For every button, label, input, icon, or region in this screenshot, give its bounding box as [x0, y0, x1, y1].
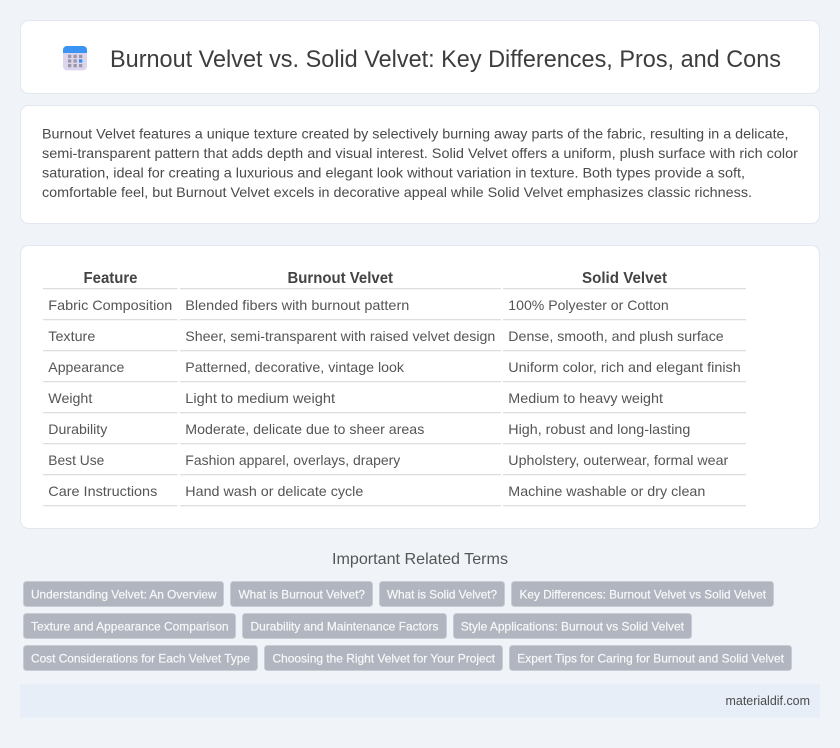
panel: header: [20, 20, 820, 94]
footer source text: materialdif.com: [726, 693, 810, 708]
row: appearance: Appearance: [48, 359, 125, 375]
row: durability: [43, 421, 746, 444]
row: fabric composition: 100% Polyester or Cotton: [508, 297, 669, 313]
tag: [24, 646, 258, 670]
row: appearance: [43, 359, 746, 382]
intro text: semi-transparent pattern that adds depth and visual interest. Solid Velvet offers a uniform, plush surface with rich color: [42, 145, 798, 161]
row: texture: Dense, smooth, and plush surface: [508, 328, 724, 344]
panel: comparison table: [20, 246, 820, 528]
tag: Understanding Velvet: An Overview: [31, 587, 217, 601]
intro text: [42, 126, 798, 200]
tag: [230, 582, 372, 606]
row: care instructions: [43, 483, 746, 506]
row: best use: Upholstery, outerwear, formal wear: [508, 452, 729, 468]
table header row: Burnout Velvet: [288, 270, 394, 287]
tag: [242, 614, 446, 638]
tag: What is Solid Velvet?: [387, 587, 497, 601]
tag: Key Differences: Burnout Velvet vs Solid Velvet: [520, 587, 767, 601]
intro text: saturation, ideal for creating a luxurious and elegant look without variation in texture. Both types provide a soft,: [42, 164, 745, 180]
row: care instructions: Hand wash or delicate cycle: [185, 483, 364, 499]
row: fabric composition: [43, 297, 746, 320]
row: weight: [43, 390, 746, 413]
tag: [454, 614, 692, 638]
tag: What is Burnout Velvet?: [238, 587, 365, 601]
tag: Texture and Appearance Comparison: [31, 619, 228, 633]
footer: [20, 684, 820, 718]
title: Burnout Velvet vs. Solid Velvet: Key Differences, Pros, and Cons: [110, 46, 781, 73]
related term tags: [24, 582, 792, 670]
row: best use: Fashion apparel, overlays, drapery: [185, 452, 400, 468]
intro text: Burnout Velvet features a unique texture created by selectively burning away parts of the fabric, resulting in a delicate,: [42, 126, 788, 142]
row: fabric composition: Fabric Composition: [48, 297, 172, 313]
intro text: comfortable feel, but Burnout Velvet excels in decorative appeal while Solid Velvet emphasizes classic richness.: [42, 184, 752, 200]
table header row: [43, 270, 746, 289]
row: weight: Medium to heavy weight: [508, 390, 663, 406]
tag: [380, 582, 504, 606]
tag: Style Applications: Burnout vs Solid Velvet: [461, 619, 685, 633]
table header row: Solid Velvet: [582, 270, 668, 287]
tag: Durability and Maintenance Factors: [250, 619, 438, 633]
row: best use: [43, 452, 746, 475]
tag: [24, 582, 224, 606]
row: durability: Durability: [48, 421, 107, 437]
row: care instructions: Care Instructions: [48, 483, 157, 499]
icon: calendar: [63, 46, 87, 70]
tag: [24, 614, 236, 638]
row: weight: Weight: [48, 390, 92, 406]
row: durability: High, robust and long-lasting: [508, 421, 690, 437]
row: weight: Light to medium weight: [185, 390, 335, 406]
tag: [512, 582, 774, 606]
row: texture: Texture: [48, 328, 96, 344]
table header row: Feature: [84, 270, 138, 287]
row: appearance: Patterned, decorative, vintage look: [185, 359, 405, 375]
row: texture: [43, 328, 746, 351]
row: care instructions: Machine washable or dry clean: [508, 483, 705, 499]
tag: [510, 646, 792, 670]
panel: introduction: [20, 106, 820, 224]
row: appearance: Uniform color, rich and elegant finish: [508, 359, 741, 375]
row: fabric composition: Blended fibers with burnout pattern: [185, 297, 409, 313]
tag: Choosing the Right Velvet for Your Project: [272, 651, 496, 665]
heading: related terms: Important Related Terms: [332, 551, 508, 568]
row: texture: Sheer, semi-transparent with raised velvet design: [185, 328, 495, 344]
row: durability: Moderate, delicate due to sheer areas: [185, 421, 424, 437]
tag: [264, 646, 502, 670]
tag: Expert Tips for Caring for Burnout and Solid Velvet: [517, 651, 785, 665]
row: best use: Best Use: [48, 452, 104, 468]
tag: Cost Considerations for Each Velvet Type: [31, 651, 250, 665]
